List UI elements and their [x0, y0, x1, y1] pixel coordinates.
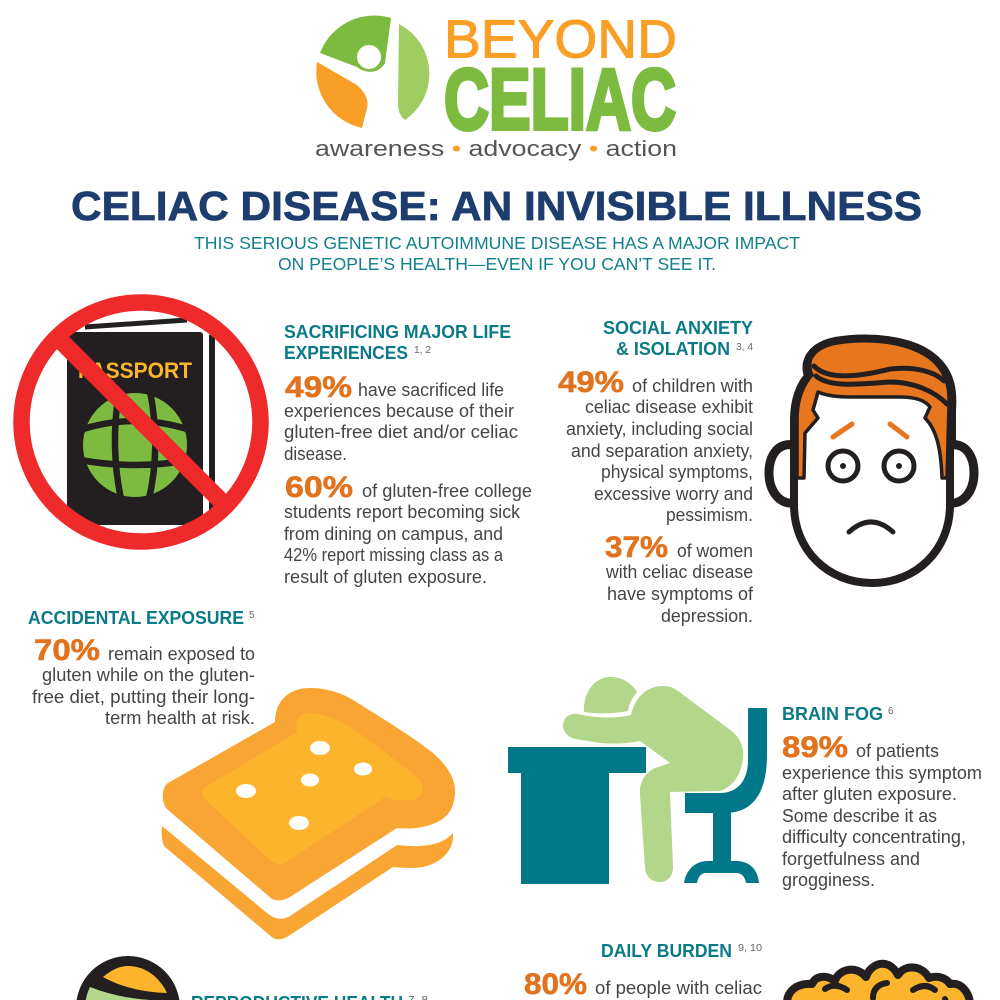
panel: sacrificing major life experiences: result of gluten exposure.	[284, 567, 487, 587]
panel: social anxiety and isolation: SOCIAL ANXIETY	[603, 318, 753, 338]
panel: sacrificing major life experiences: of gluten-free college	[362, 481, 532, 501]
panel: accidental exposure: remain exposed to	[108, 644, 255, 664]
panel: sacrificing major life experiences: from dining on campus, and	[284, 524, 503, 544]
panel: sacrificing major life experiences	[284, 322, 532, 587]
panel: brain fog: of patients	[856, 741, 939, 761]
panel: accidental exposure: 5	[249, 610, 255, 621]
logo word: Celiac: CELIAC	[444, 52, 676, 148]
panel: social anxiety and isolation: physical symptoms,	[601, 462, 753, 482]
panel: social anxiety and isolation: pessimism.	[666, 505, 753, 525]
panel: social anxiety and isolation: celiac disease exhibit	[585, 397, 753, 417]
panel: brain fog: after gluten exposure.	[782, 784, 957, 804]
panel: brain fog: BRAIN FOG	[782, 704, 883, 724]
panel: sacrificing major life experiences: disease.	[284, 444, 347, 464]
icon: brain	[787, 964, 970, 1000]
title: CELIAC DISEASE: AN INVISIBLE ILLNESS	[71, 183, 922, 229]
panel: sacrificing major life experiences: gluten-free diet and/or celiac	[284, 422, 518, 442]
logo word: Beyond: BEYOND	[444, 10, 677, 70]
subtitle: ON PEOPLE’S HEALTH—EVEN IF YOU CAN’T SEE IT.	[278, 254, 716, 274]
panel: sacrificing major life experiences: 1, 2	[414, 345, 431, 356]
panel: brain fog: difficulty concentrating,	[782, 827, 966, 847]
icon: crossed-out passport: PASSPORT	[78, 358, 193, 383]
panel: brain fog	[782, 704, 982, 890]
panel: daily burden: DAILY BURDEN	[601, 941, 732, 961]
logo mark	[316, 16, 429, 128]
panel: sacrificing major life experiences: 42% report missing class as a	[284, 545, 504, 565]
panel: social anxiety and isolation: of children with	[632, 376, 753, 396]
logo tagline: awareness • advocacy • action	[315, 136, 677, 161]
panel: social anxiety and isolation: of women	[677, 541, 753, 561]
panel: sacrificing major life experiences: have sacrificed life	[358, 380, 504, 400]
panel: social anxiety and isolation	[558, 318, 754, 626]
icon: reproductive organ	[76, 956, 180, 1000]
panel: social anxiety and isolation: anxiety, including social	[566, 419, 753, 439]
panel: sacrificing major life experiences: EXPERIENCES	[284, 343, 408, 363]
logo: Beyond Celiac	[315, 10, 677, 161]
icon: person asleep at desk	[508, 677, 767, 884]
panel: social anxiety and isolation: excessive worry and	[594, 484, 753, 504]
panel: accidental exposure	[28, 608, 255, 728]
panel: social anxiety and isolation: & ISOLATION	[616, 339, 730, 359]
panel: social anxiety and isolation: 3, 4	[736, 342, 753, 353]
panel: accidental exposure: gluten while on the gluten-	[42, 665, 255, 685]
panel: sacrificing major life experiences: 49%	[285, 371, 352, 404]
panel: social anxiety and isolation: 37%	[605, 531, 668, 564]
panel: brain fog: 6	[888, 706, 894, 717]
panel: sacrificing major life experiences: SACRIFICING MAJOR LIFE	[284, 322, 511, 342]
panel: accidental exposure: 70%	[34, 634, 100, 667]
panel: sacrificing major life experiences: students report becoming sick	[284, 502, 521, 522]
panel: brain fog: forgetfulness and	[782, 849, 920, 869]
panel: social anxiety and isolation: and separation anxiety,	[571, 441, 753, 461]
panel: social anxiety and isolation: 49%	[558, 366, 624, 399]
panel: daily burden	[524, 941, 762, 1000]
icon: worried face	[769, 339, 974, 583]
subtitle	[194, 233, 800, 274]
panel: social anxiety and isolation: depression.	[661, 606, 753, 626]
panel: daily burden: of people with celiac	[595, 978, 762, 998]
panel: sacrificing major life experiences: experiences because of their	[284, 401, 514, 421]
panel: brain fog: Some describe it as	[782, 806, 937, 826]
panel: accidental exposure: term health at risk.	[105, 708, 255, 728]
icon: crossed-out passport	[22, 302, 260, 542]
icon: slice of toast	[162, 688, 455, 939]
panel: brain fog: 89%	[782, 731, 848, 764]
panel: social anxiety and isolation: with celiac disease	[605, 562, 753, 582]
panel: social anxiety and isolation: have symptoms of	[607, 584, 754, 604]
subtitle: THIS SERIOUS GENETIC AUTOIMMUNE DISEASE HAS A MAJOR IMPACT	[194, 233, 800, 253]
panel: daily burden: 9, 10	[738, 943, 762, 954]
panel: brain fog: experience this symptom	[782, 763, 982, 783]
panel: accidental exposure: free diet, putting their long-	[32, 687, 255, 707]
panel: accidental exposure: ACCIDENTAL EXPOSURE	[28, 608, 244, 628]
panel: brain fog: grogginess.	[782, 870, 875, 890]
panel: sacrificing major life experiences: 60%	[285, 471, 353, 504]
